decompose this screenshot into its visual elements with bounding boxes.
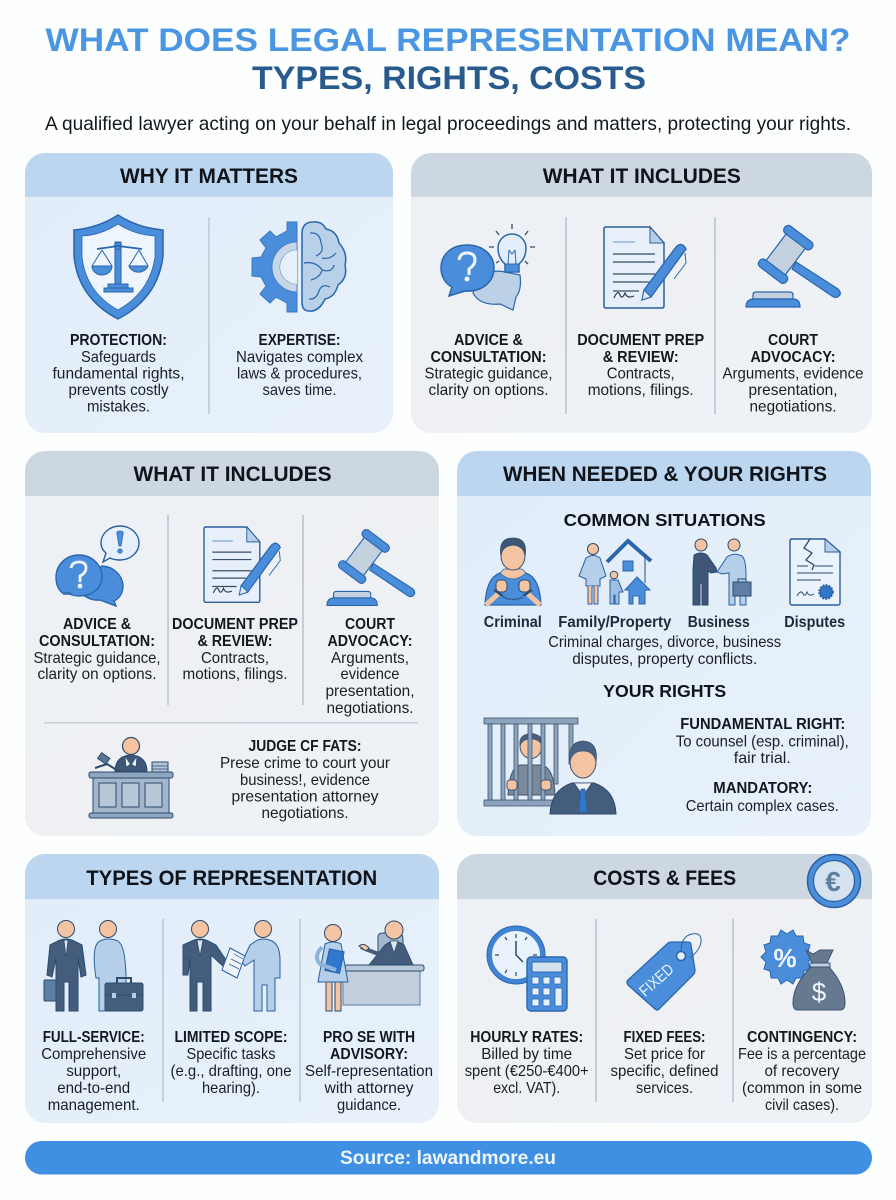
- text: judge of facts: presentation attorney: [232, 788, 378, 806]
- icon: shield with scales: [74, 215, 163, 319]
- text: protection: PROTECTION:: [70, 332, 167, 349]
- text: advice and consultation: CONSULTATION:: [430, 349, 546, 366]
- text: fundamental right: fair trial.: [734, 750, 791, 767]
- text: court advocacy: [326, 616, 414, 717]
- text: pro se with advisory: Self-representation: [305, 1063, 433, 1080]
- text: mandatory: Certain complex cases.: [686, 798, 839, 815]
- text: hourly rates: spent (€250-€400+: [465, 1063, 589, 1080]
- text: full-service: support,: [66, 1063, 121, 1080]
- text: limited scope: (e.g., drafting, one: [170, 1063, 292, 1080]
- text: contingency: Fee is a percentage: [738, 1046, 866, 1063]
- panel: what it includes (top): [411, 153, 872, 433]
- icon: fixed price tag: FIXED: [636, 961, 678, 1000]
- text: fixed fees: FIXED FEES:: [624, 1029, 706, 1046]
- text: contingency: CONTINGENCY:: [747, 1029, 857, 1046]
- text: protection: fundamental rights,: [52, 366, 184, 382]
- text: court advocacy: ADVOCACY:: [750, 349, 836, 366]
- icon: percent badge and money bag: %: [773, 943, 797, 973]
- icon: gavel: [327, 528, 415, 605]
- text: expertise: laws & procedures,: [237, 366, 362, 382]
- text: expertise: saves time.: [262, 382, 336, 399]
- labels: situations: Criminal: [484, 614, 542, 631]
- text: pro se with advisory: guidance.: [337, 1097, 401, 1114]
- icon: document and pen: [204, 527, 280, 602]
- text: contingency: of recovery: [764, 1063, 840, 1080]
- icon: limited scope figures: [183, 920, 280, 1011]
- labels: situations: Disputes: [784, 614, 845, 631]
- text: document prep and review: [577, 332, 704, 399]
- text: judge of facts: negotiations.: [262, 805, 348, 822]
- panel: what it includes (middle): [25, 451, 439, 836]
- text: hourly rates: HOURLY RATES:: [470, 1029, 583, 1046]
- text: full-service: FULL-SERVICE:: [43, 1029, 145, 1046]
- icon: business handshake: [693, 539, 751, 605]
- text: court advocacy: ADVOCACY:: [328, 633, 412, 650]
- text: full-service: management.: [48, 1097, 140, 1114]
- text: judge of facts: business!, evidence: [240, 772, 370, 789]
- panel: why it matters: [25, 153, 393, 433]
- subheading: your rights: YOUR RIGHTS: [603, 681, 726, 701]
- subheading: common situations: COMMON SITUATIONS: [564, 510, 766, 530]
- subtitle: A qualified lawyer acting on your behalf in legal proceedings and matters, protecting your rights.: [45, 113, 851, 135]
- labels: situations: Family/Property: [558, 614, 672, 631]
- icon: speech bubbles and light bulb: [441, 224, 535, 310]
- text: advice and consultation: Strategic guidance,: [34, 650, 160, 667]
- text: pro se with advisory: with attorney: [324, 1080, 414, 1097]
- text: full-service: [41, 1029, 146, 1114]
- text: limited scope: LIMITED SCOPE:: [174, 1029, 288, 1046]
- text: court advocacy: COURT: [768, 332, 818, 349]
- text: fixed fees: Set price for: [624, 1046, 706, 1063]
- text: fundamental right: FUNDAMENTAL RIGHT:: [680, 716, 845, 733]
- text: judge of facts: Prese crime to court your: [220, 755, 391, 772]
- text: fundamental right: To counsel (esp. criminal),: [676, 734, 849, 751]
- text: court advocacy: presentation,: [326, 683, 414, 700]
- text: document prep and review: [172, 616, 298, 683]
- icon: full-service figures: [44, 920, 143, 1011]
- icon: gavel: [746, 224, 840, 307]
- heading: what it includes: WHAT IT INCLUDES: [543, 165, 741, 188]
- text: situations description: [548, 634, 781, 668]
- labels: situations: [484, 614, 845, 631]
- icon: pro se with advisory: [317, 921, 424, 1011]
- text: advice and consultation: ADVICE &: [63, 616, 131, 633]
- icon: document and pen: [604, 227, 686, 308]
- text: full-service: Comprehensive: [41, 1046, 146, 1063]
- text: document prep and review: DOCUMENT PREP: [172, 616, 298, 633]
- icon: fixed price tag: [627, 934, 701, 1010]
- heading: what it includes: WHAT IT INCLUDES: [134, 463, 332, 486]
- labels: situations: Business: [688, 614, 750, 631]
- text: court advocacy: Arguments, evidence: [722, 366, 864, 382]
- text: advice and consultation: ADVICE &: [454, 332, 523, 349]
- text: document prep and review: motions, filings.: [182, 666, 288, 683]
- text: court advocacy: Arguments,: [331, 650, 409, 667]
- text: advice and consultation: clarity on options.: [38, 666, 156, 683]
- icon: euro badge: €: [825, 866, 841, 897]
- text: document prep and review: & REVIEW:: [198, 633, 272, 650]
- text: court advocacy: presentation,: [748, 382, 838, 399]
- text: pro se with advisory: [305, 1029, 433, 1114]
- text: advice and consultation: clarity on options.: [428, 382, 548, 399]
- text: expertise: Navigates complex: [236, 349, 363, 366]
- text: fixed fees: [610, 1029, 718, 1097]
- text: court advocacy: COURT: [345, 616, 395, 633]
- text: document prep and review: DOCUMENT PREP: [577, 332, 704, 349]
- panel: costs and fees: [457, 854, 872, 1123]
- source bar: Source: lawandmore.eu: [340, 1148, 556, 1169]
- text: advice and consultation: Strategic guidance,: [424, 366, 552, 382]
- text: document prep and review: Contracts,: [201, 650, 269, 667]
- text: limited scope: [170, 1029, 292, 1097]
- text: expertise: EXPERTISE:: [258, 332, 340, 349]
- text: fixed fees: services.: [636, 1080, 693, 1097]
- title: [46, 22, 851, 96]
- heading: costs and fees: COSTS & FEES: [593, 867, 736, 890]
- text: full-service: end-to-end: [57, 1080, 130, 1097]
- icon: family and property: [579, 541, 651, 604]
- text: pro se with advisory: PRO SE WITH: [323, 1029, 415, 1046]
- panel: when needed and your rights: [457, 451, 871, 836]
- heading: why it matters: WHY IT MATTERS: [120, 165, 298, 188]
- icon: prisoner behind bars with lawyer: [484, 718, 616, 814]
- text: court advocacy: negotiations.: [750, 398, 836, 416]
- heading: types of representation: TYPES OF REPRESENTATION: [86, 867, 377, 890]
- text: contingency: [738, 1029, 866, 1114]
- text: fundamental right: [676, 716, 849, 767]
- icon: percent badge and money bag: $: [812, 977, 827, 1007]
- text: limited scope: Specific tasks: [186, 1046, 276, 1063]
- text: document prep and review: Contracts,: [607, 366, 675, 382]
- panel: types of representation: [25, 854, 439, 1123]
- text: limited scope: hearing).: [202, 1080, 260, 1097]
- text: court advocacy: negotiations.: [326, 700, 414, 717]
- text: court advocacy: [722, 332, 864, 416]
- title: WHAT DOES LEGAL REPRESENTATION MEAN?: [46, 22, 851, 58]
- text: judge of facts: JUDGE CF FATS:: [248, 738, 362, 755]
- text: pro se with advisory: ADVISORY:: [330, 1046, 408, 1063]
- text: protection: [52, 332, 184, 416]
- title: TYPES, RIGHTS, COSTS: [252, 60, 646, 96]
- icon: torn contract: [790, 539, 840, 605]
- text: advice and consultation: CONSULTATION:: [39, 633, 155, 650]
- text: expertise: [236, 332, 363, 399]
- text: hourly rates: Billed by time: [481, 1046, 572, 1063]
- text: mandatory: MANDATORY:: [713, 780, 812, 797]
- text: mandatory: [686, 780, 839, 815]
- text: protection: Safeguards: [81, 349, 156, 366]
- text: court advocacy: evidence: [340, 666, 400, 683]
- text: fixed fees: specific, defined: [610, 1063, 718, 1080]
- icon: gear and brain: [252, 222, 346, 312]
- text: document prep and review: motions, filings.: [588, 382, 694, 399]
- text: situations description: disputes, property conflicts.: [572, 651, 757, 668]
- text: situations description: Criminal charges, divorce, business: [548, 634, 781, 651]
- text: advice and consultation: [34, 616, 160, 683]
- heading: when needed and your rights: WHEN NEEDED & YOUR RIGHTS: [503, 463, 827, 486]
- text: contingency: (common in some: [742, 1080, 862, 1097]
- text: document prep and review: & REVIEW:: [603, 349, 679, 366]
- icon: percent badge and money bag: [761, 930, 845, 1010]
- source bar: [25, 1141, 872, 1174]
- text: protection: prevents costly: [68, 382, 168, 399]
- icon: euro badge: [808, 854, 860, 908]
- text: advice and consultation: [424, 332, 552, 399]
- text: judge of facts: [220, 738, 391, 822]
- text: protection: mistakes.: [87, 398, 150, 416]
- icon: criminal in handcuffs: [485, 538, 541, 605]
- text: hourly rates: excl. VAT).: [493, 1080, 560, 1097]
- icon: clock and calculator: [487, 926, 567, 1011]
- text: hourly rates: [465, 1029, 589, 1097]
- icon: speech bubbles: [56, 526, 139, 606]
- text: contingency: civil cases).: [765, 1097, 839, 1114]
- icon: judge at bench: [89, 738, 173, 818]
